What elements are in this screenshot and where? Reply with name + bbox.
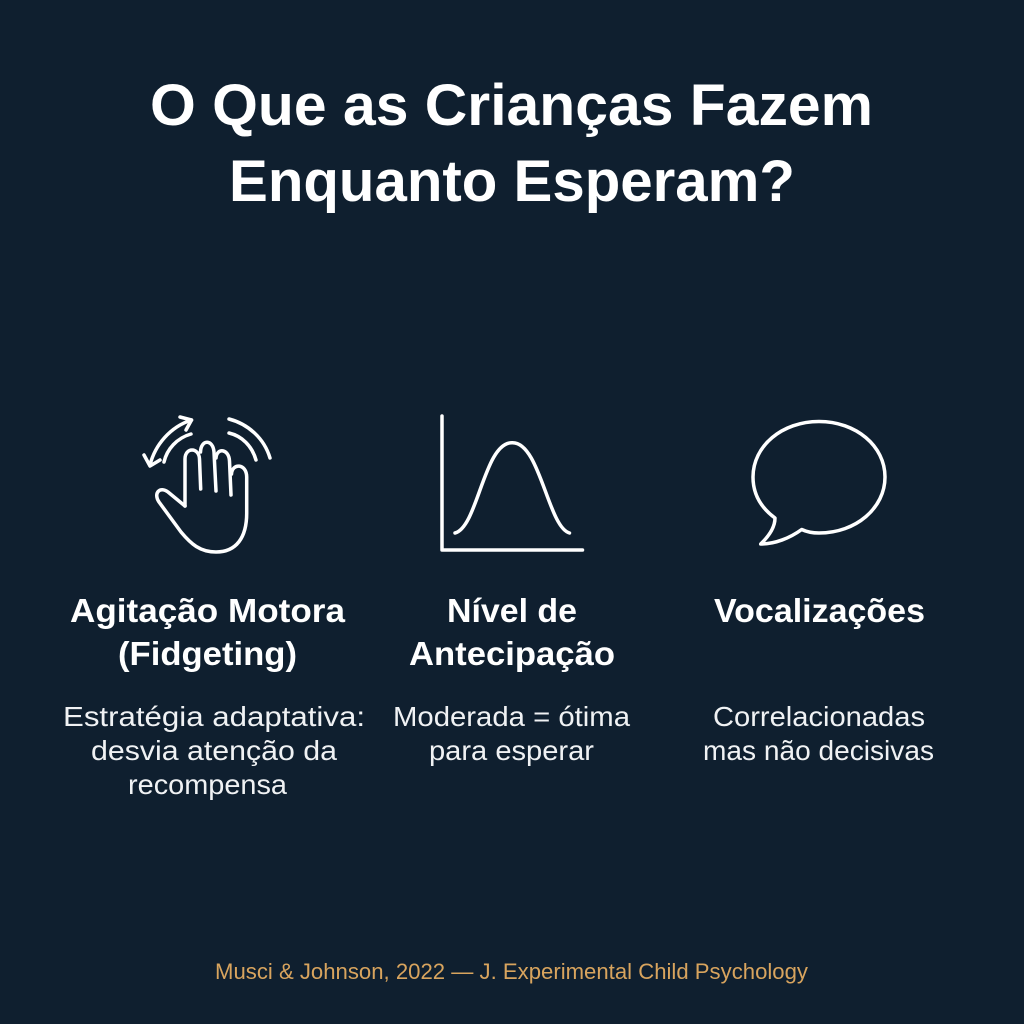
- text: agitação motora description: [63, 701, 365, 800]
- icon: bell curve chart: [442, 416, 582, 550]
- panel: vocalizações: [703, 422, 934, 766]
- text: vocalizações description: [703, 701, 934, 766]
- heading: nível de antecipação: Antecipação: [409, 635, 615, 672]
- text: agitação motora description: Estratégia adaptativa:: [63, 701, 365, 732]
- panel: nível de antecipação: [393, 416, 630, 766]
- text: nível de antecipação description: [393, 701, 630, 766]
- text: nível de antecipação description: para esperar: [429, 735, 594, 766]
- title: Enquanto Esperam?: [229, 149, 795, 214]
- icon: waving hand with motion arrows: [144, 417, 270, 552]
- text: agitação motora description: recompensa: [128, 769, 287, 800]
- text: agitação motora description: desvia atenção da: [91, 735, 337, 766]
- icon: speech bubble: [753, 422, 885, 544]
- heading: nível de antecipação: Nível de: [447, 592, 577, 629]
- title: O Que as Crianças Fazem: [150, 73, 873, 138]
- heading: vocalizações: Vocalizações: [714, 592, 925, 629]
- heading: agitação motora: [70, 592, 346, 672]
- heading: agitação motora: (Fidgeting): [118, 635, 297, 672]
- text: vocalizações description: mas não decisivas: [703, 735, 934, 766]
- heading: nível de antecipação: [409, 592, 615, 672]
- text: vocalizações description: Correlacionadas: [713, 701, 925, 732]
- source citation: Musci & Johnson, 2022 — J. Experimental Child Psychology: [215, 959, 808, 984]
- heading: agitação motora: Agitação Motora: [70, 592, 346, 629]
- panel: agitação motora: [63, 417, 365, 800]
- text: nível de antecipação description: Moderada = ótima: [393, 701, 630, 732]
- title: [150, 73, 873, 214]
